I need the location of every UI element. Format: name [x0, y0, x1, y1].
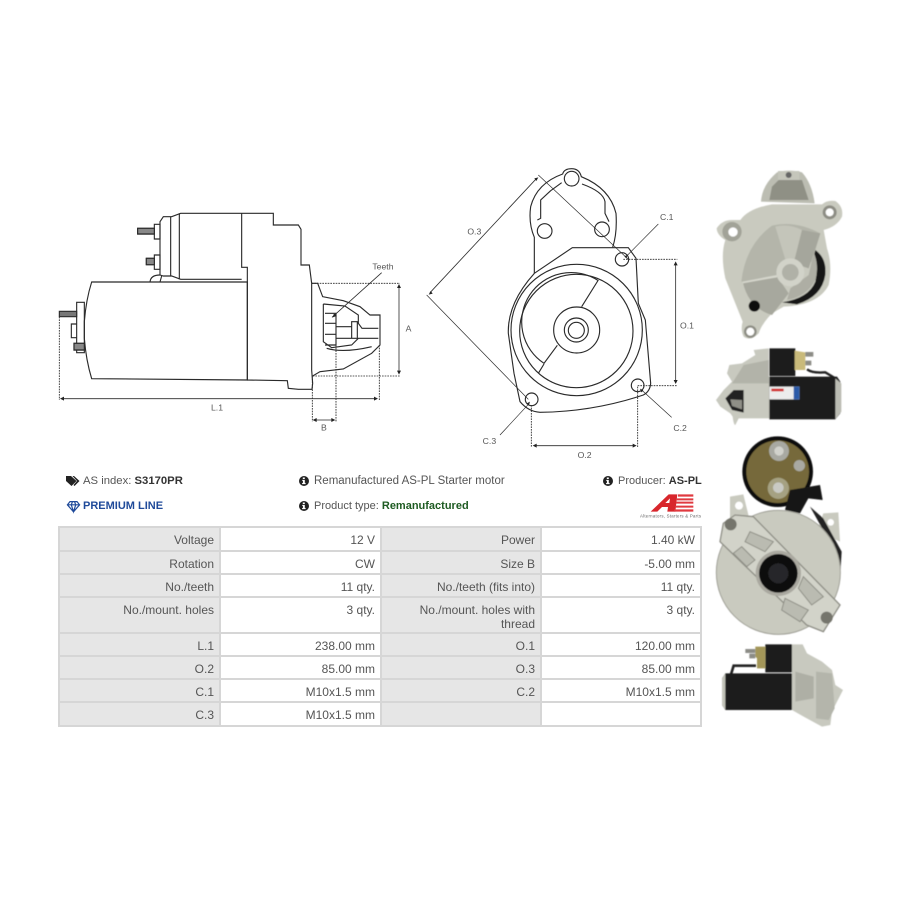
technical drawing: side view: Teeth	[372, 262, 394, 272]
technical drawing: front view: O.2	[578, 450, 592, 460]
technical drawing: front view: C.1	[660, 212, 674, 222]
technical drawing: front view: O.1	[680, 321, 694, 331]
row: L.1 and O.1: 238.00 mm	[315, 639, 375, 653]
row: O.2 and O.3: O.3	[516, 662, 535, 676]
technical drawing: front view: C.3	[483, 436, 496, 446]
product description: Remanufactured AS-PL Starter motor	[314, 475, 505, 487]
row: rotation and size B: Size B	[500, 557, 535, 571]
row: voltage and power: 12 V	[350, 533, 375, 547]
row: teeth: No./teeth	[165, 580, 214, 594]
row: C.1 and C.2: M10x1.5 mm	[626, 685, 695, 699]
row: teeth: 11 qty.	[341, 580, 375, 594]
technical drawing: front view	[427, 169, 694, 460]
row: rotation and size B: Rotation	[169, 557, 214, 571]
technical drawing: side view: A	[406, 324, 412, 334]
row: L.1 and O.1: L.1	[197, 639, 214, 653]
logo: AS	[640, 494, 701, 519]
row: O.2 and O.3: O.2	[195, 662, 214, 676]
row: rotation and size B: -5.00 mm	[644, 557, 695, 571]
icon: info product type	[299, 501, 309, 511]
icon: info producer	[603, 476, 613, 486]
row: mounting holes: 3 qty.	[667, 603, 695, 617]
technical drawing: side view: L.1	[211, 403, 223, 413]
row: mounting holes: 3 qty.	[347, 603, 375, 617]
producer: Producer: AS-PL	[618, 475, 702, 487]
product type: Product type: Remanufactured	[314, 500, 469, 512]
technical drawing: front view: C.2	[673, 423, 687, 433]
row: O.2 and O.3: 85.00 mm	[322, 662, 375, 676]
technical drawing: front view: O.3	[467, 227, 481, 237]
row: teeth: No./teeth (fits into)	[437, 580, 535, 594]
row: C.3	[60, 703, 700, 725]
row: C.1 and C.2: M10x1.5 mm	[306, 685, 375, 699]
icon: tag	[66, 476, 80, 486]
row: C.3: C.3	[195, 708, 214, 722]
technical drawing: side view: B	[321, 423, 327, 433]
premium line label: PREMIUM LINE	[83, 500, 163, 512]
specification table	[58, 526, 702, 727]
row: teeth	[60, 575, 700, 596]
row: C.3: M10x1.5 mm	[306, 708, 375, 722]
row: mounting holes	[60, 598, 700, 632]
row: mounting holes: No./mount. holes with thread	[420, 603, 535, 631]
photo: commutator end of starter	[716, 436, 842, 634]
row: C.1 and C.2	[60, 680, 700, 701]
row: voltage and power: 1.40 kW	[651, 533, 695, 547]
row: rotation and size B	[60, 552, 700, 573]
photo: starter side view, bottom	[722, 644, 843, 727]
row: O.2 and O.3: 85.00 mm	[642, 662, 695, 676]
row: teeth: 11 qty.	[661, 580, 695, 594]
AS index: AS index: S3170PR	[83, 475, 183, 487]
logo: AS: Alternators, Starters & Parts	[640, 514, 701, 519]
icon: info remanufactured	[299, 476, 309, 486]
row: voltage and power: Power	[501, 533, 535, 547]
row: mounting holes: No./mount. holes	[123, 603, 214, 617]
row: L.1 and O.1: O.1	[516, 639, 535, 653]
row: voltage and power: Voltage	[174, 533, 214, 547]
row: C.1 and C.2: C.1	[195, 685, 214, 699]
row: L.1 and O.1	[60, 634, 700, 655]
row: rotation and size B: CW	[355, 557, 375, 571]
icon: premium diamond	[67, 502, 80, 512]
row: C.1 and C.2: C.2	[516, 685, 535, 699]
row: L.1 and O.1: 120.00 mm	[635, 639, 695, 653]
row: O.2 and O.3	[60, 657, 700, 678]
photo: drive end of starter	[717, 171, 842, 339]
row: voltage and power	[60, 528, 700, 550]
photo: starter side view, top	[716, 348, 841, 425]
